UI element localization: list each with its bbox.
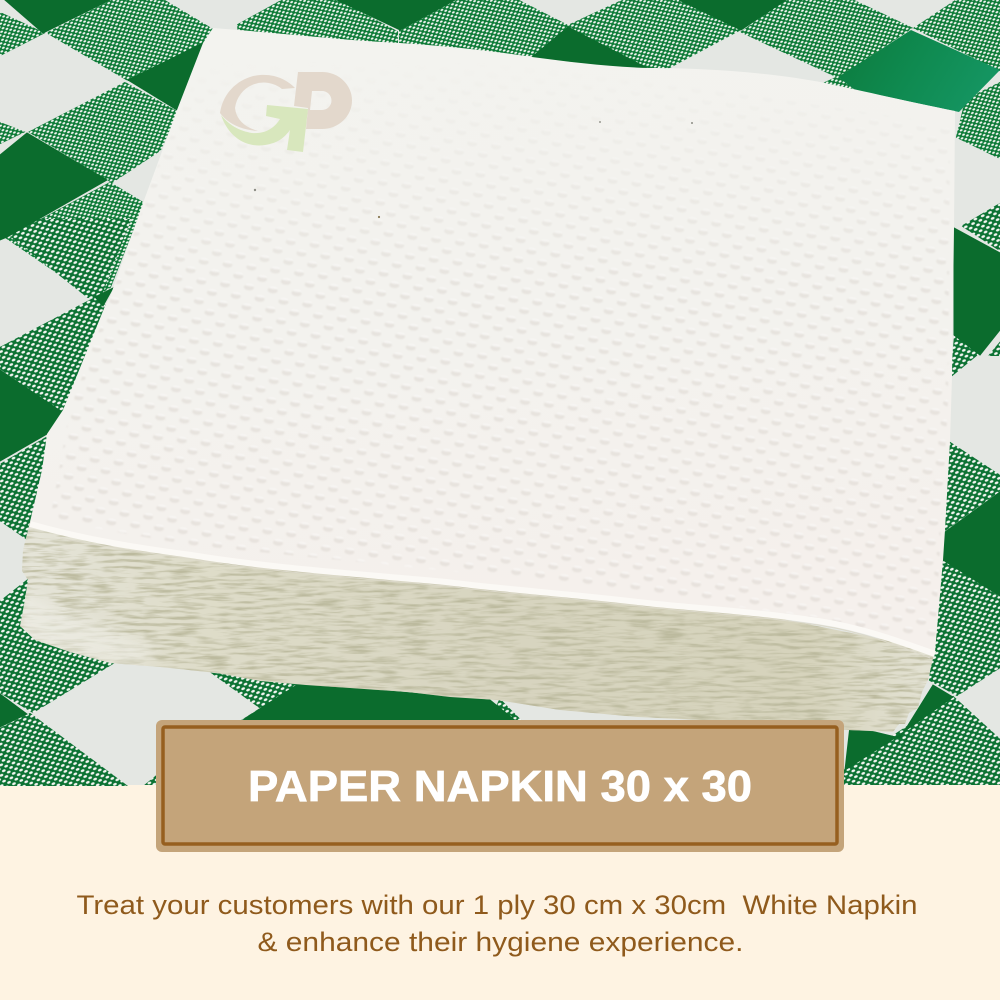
photo: gingham tablecloth xyxy=(0,0,1000,785)
logo: GP mark xyxy=(220,72,352,152)
description text: Treat your customers with our 1 ply 30 cm x 30cm White Napkin xyxy=(76,890,918,920)
title banner xyxy=(156,720,844,852)
photo: napkin stack side xyxy=(20,522,934,732)
photo: napkin top sheet xyxy=(30,28,955,658)
description text xyxy=(76,890,918,957)
description text: & enhance their hygiene experience. xyxy=(258,927,744,957)
logo arrow xyxy=(221,105,308,152)
logo letter G xyxy=(220,75,295,131)
title text: PAPER NAPKIN 30 x 30 xyxy=(248,762,752,811)
logo letter P xyxy=(294,72,352,129)
